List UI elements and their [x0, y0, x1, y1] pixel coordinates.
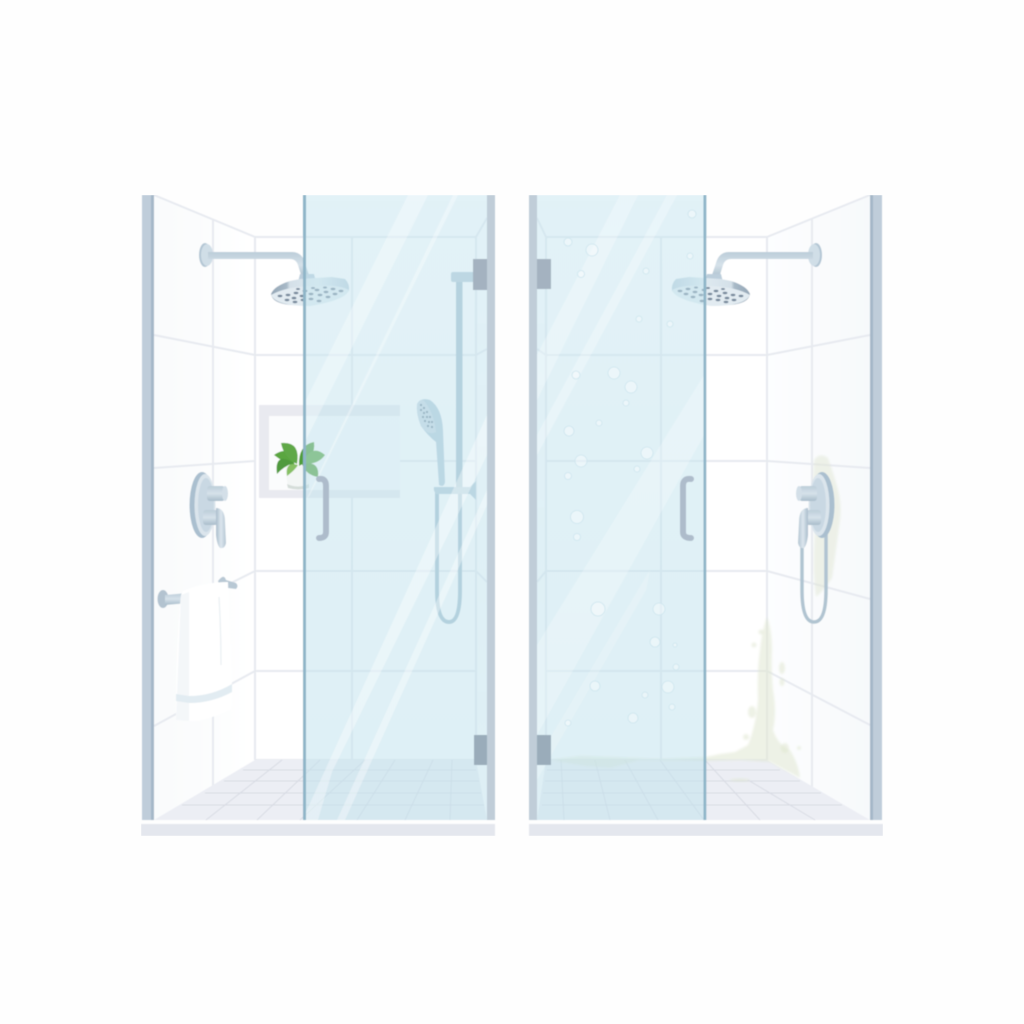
tiled floor: [154, 760, 487, 820]
water droplets on glass: [564, 210, 696, 726]
right frame post: [487, 195, 495, 820]
mold stain along floor and corner: [550, 617, 801, 782]
shower valve and hose: [796, 472, 834, 622]
door handle: [319, 479, 326, 538]
rain shower head: [672, 243, 822, 306]
towel: [176, 582, 232, 721]
shower valve: [190, 472, 228, 548]
glass reflections: [306, 195, 487, 820]
lower hinge: [474, 735, 487, 765]
panel: clean shower (left): [141, 195, 495, 836]
slide rail and hand shower: [417, 272, 476, 622]
left side wall tiles: [154, 195, 487, 820]
tiled floor: [537, 760, 870, 820]
glass door panel: [303, 195, 487, 820]
right side wall tiles: [537, 195, 870, 820]
glass door panel: [537, 195, 704, 820]
door edge: [704, 195, 706, 820]
base threshold: [529, 824, 883, 836]
towel bar: [158, 577, 238, 608]
recessed niche: [259, 405, 400, 498]
door edge: [303, 195, 306, 820]
base threshold: [141, 824, 495, 836]
icon: potted plant: [274, 442, 325, 490]
door handle: [683, 479, 691, 538]
rain shower head: [199, 243, 349, 306]
panel: dirty shower (right): [529, 195, 883, 836]
right frame post: [870, 195, 882, 820]
left frame post: [142, 195, 154, 820]
left frame post: [529, 195, 537, 820]
mold stain behind valve: [813, 455, 841, 597]
back wall: [255, 237, 476, 760]
upper hinge: [537, 259, 551, 289]
glass reflections: [537, 195, 704, 780]
lower hinge: [537, 735, 551, 765]
back wall: [546, 237, 767, 760]
upper hinge: [473, 259, 487, 290]
